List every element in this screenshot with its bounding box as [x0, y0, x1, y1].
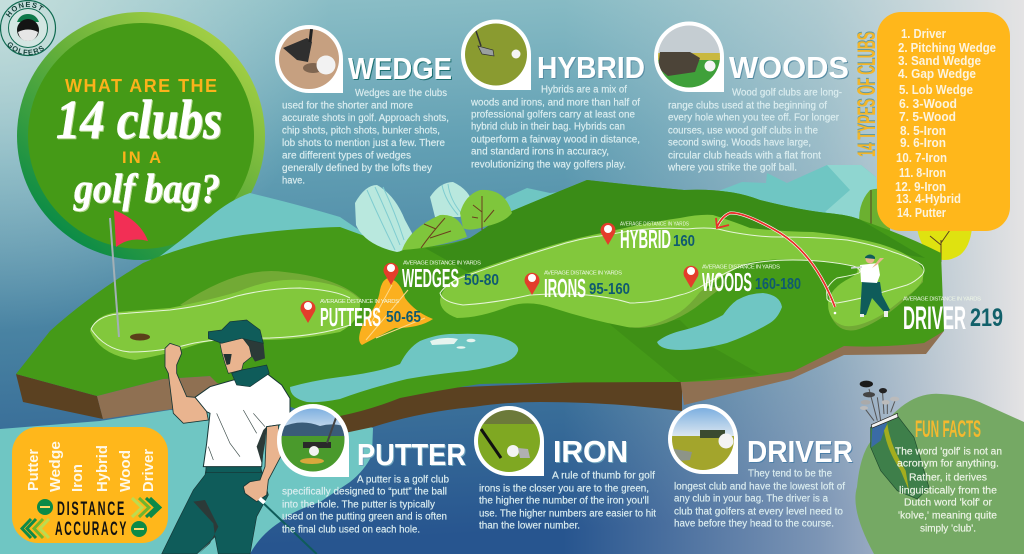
map label: irons: AVERAGE DISTANCE IN YARDS — [544, 270, 622, 276]
map label: wedges — [384, 260, 499, 293]
panel: distance and accuracy scale: DISTANCE — [57, 499, 126, 520]
logo: Honest Golfers — [0, 0, 56, 56]
body text: second swing. Woods have large, — [668, 138, 811, 148]
map label: woods: AVERAGE DISTANCE IN YARDS — [702, 264, 780, 270]
body text: are different types of wedges — [282, 150, 411, 162]
body text: used on the putting green and is often — [282, 512, 447, 522]
body text: Hybrids are a mix of — [541, 84, 627, 96]
bushes — [402, 190, 512, 250]
body text: the final club used on each hole. — [282, 524, 420, 536]
body text: irons is the closer you are to the green, — [479, 484, 649, 494]
map label: wedges: 50-80 — [464, 272, 499, 289]
photo: iron and ball — [474, 406, 544, 476]
map label: putters: PUTTERS — [320, 302, 381, 332]
body text: A rule of thumb for golf — [552, 470, 655, 482]
panel: distance and accuracy scale: Wedge — [47, 441, 64, 492]
body text: specifically designed to “putt” the ball — [282, 486, 447, 498]
pale leaves — [355, 182, 473, 252]
body text: have. — [282, 176, 305, 186]
heading: WOODS — [729, 50, 849, 85]
icon: accuracy minus — [131, 521, 147, 537]
body text: Dutch word 'kolf' or — [904, 498, 993, 508]
panel: list of 14 clubs: 3. Sand Wedge — [898, 53, 981, 68]
body text: every hole when you tee off. For longer — [668, 112, 840, 124]
body text: used for the shorter and more — [282, 100, 414, 112]
body text: the higher the number of the iron you'll — [479, 496, 649, 506]
heading: DRIVER — [747, 434, 853, 469]
body text: woods and irons, and more than half of — [470, 98, 640, 108]
body text: hybrid club in their bag. Hybrids can — [471, 122, 625, 132]
body text: simply 'club'. — [920, 524, 976, 534]
photo: hybrid club on grass — [461, 19, 531, 90]
fairway contour lines — [440, 228, 924, 305]
heading: IRON — [553, 434, 628, 469]
golf course land — [0, 180, 944, 554]
icon: distance minus — [37, 499, 53, 515]
panel: list of 14 clubs: 6. 3-Wood — [899, 96, 957, 111]
panel: distance and accuracy scale: Iron — [69, 464, 86, 492]
logo: Honest Golfers: HONEST — [6, 2, 44, 18]
body text — [470, 84, 640, 170]
body text: longest club and have the lowest loft of — [674, 482, 845, 492]
dark hill — [425, 180, 925, 275]
red shot arrow — [716, 213, 836, 314]
panel: distance and accuracy scale — [12, 427, 168, 543]
map label: hybrid: HYBRID — [620, 224, 671, 254]
photo: wedge in sand — [275, 25, 345, 95]
panel: distance and accuracy scale: Hybrid — [94, 445, 111, 492]
body text: linguistically from the — [899, 486, 997, 496]
body text: professional golfers carry at least one — [471, 110, 636, 120]
body text: and standard irons in accuracy, — [471, 146, 609, 158]
panel: list of 14 clubs: 12. 9-Iron — [895, 179, 946, 194]
icon: accuracy chevrons — [22, 519, 49, 538]
teal lake — [0, 410, 373, 554]
panel: list of 14 clubs: 13. 4-Hybrid — [896, 191, 961, 206]
title text: WHAT ARE THE — [65, 76, 217, 96]
body text: club that golfers at every level need to — [674, 506, 844, 518]
map label: hybrid — [601, 222, 695, 254]
panel: list of 14 clubs: 5. Lob Wedge — [899, 82, 973, 97]
body text: generally defined by the lofts they — [282, 163, 432, 174]
photo: wood club head — [654, 21, 724, 94]
body text: have before they head to the course. — [674, 518, 834, 530]
pin — [524, 273, 539, 295]
pond highlights — [430, 338, 476, 349]
sand trap — [359, 278, 433, 345]
grass — [16, 180, 944, 416]
body text: courses, use wood golf clubs in the — [668, 126, 819, 136]
map label: irons: IRONS — [544, 273, 586, 303]
right pond — [657, 293, 782, 350]
panel: fun facts — [855, 381, 1024, 554]
panel: list of 14 clubs: 1. Driver — [901, 26, 946, 41]
river pond — [290, 334, 518, 402]
body text: Wood golf clubs are long- — [732, 88, 842, 98]
map label: driver: AVERAGE DISTANCE IN YARDS — [903, 296, 981, 302]
body text: where you strike the golf ball. — [667, 162, 797, 174]
hole — [130, 334, 150, 340]
body text: into the hole. The putter is typically — [282, 500, 435, 510]
green blob — [855, 394, 1024, 554]
heading: WEDGE — [348, 51, 452, 86]
pin — [384, 263, 398, 285]
panel: list of 14 clubs: 14. Putter — [897, 205, 946, 220]
body text — [667, 88, 842, 174]
panel: distance and accuracy scale: Putter — [25, 449, 42, 491]
panel: list of 14 clubs: 2. Pitching Wedge — [898, 40, 996, 55]
pin — [684, 266, 698, 288]
heading: HYBRID — [537, 50, 645, 85]
body text — [479, 470, 656, 532]
title circle — [17, 12, 265, 260]
map label: wedges: WEDGES — [402, 263, 459, 293]
title text — [56, 76, 222, 211]
panel: distance and accuracy scale: Driver — [140, 449, 157, 492]
map label: irons: 95-160 — [589, 281, 630, 298]
map label: driver: DRIVER — [903, 300, 966, 336]
map label: woods: WOODS — [702, 267, 752, 297]
body text: than the lower number. — [479, 520, 580, 532]
body text — [895, 446, 1002, 534]
panel: iron — [474, 406, 656, 532]
body text: They tend to be the — [748, 468, 833, 480]
panel: hybrid — [461, 19, 645, 170]
panel: list of 14 clubs: 11. 8-Iron — [899, 165, 946, 180]
panel: wedge — [275, 25, 452, 186]
body text: accurate shots in golf. Approach shots, — [282, 113, 449, 124]
body text: circular club heads with a flat front — [668, 150, 821, 162]
soil edge — [340, 378, 682, 434]
map label: putters — [300, 299, 421, 332]
map label: driver: 219 — [970, 304, 1003, 332]
body text: acronym for anything. — [897, 458, 999, 470]
body text: The word 'golf' is not an — [895, 446, 1002, 458]
body text: any club in your bag. The driver is a — [674, 494, 829, 504]
map label: wedges: AVERAGE DISTANCE IN YARDS — [403, 260, 481, 266]
body text: lob shots to mention just a few. There — [282, 138, 446, 149]
body text: A putter is a golf club — [357, 474, 450, 486]
title text: IN A — [122, 149, 161, 167]
icon: golf bag — [860, 381, 929, 499]
panel: list of 14 clubs: 9. 6-Iron — [900, 135, 946, 150]
photo: putter and hole — [277, 404, 349, 477]
logo: Honest Golfers: GOLFERS — [8, 42, 44, 55]
back trees — [859, 189, 972, 262]
flag pole and flag — [110, 210, 148, 337]
body text: use. The higher numbers are easier to hit — [479, 508, 656, 520]
back hills and mountains — [127, 165, 972, 290]
logo face — [17, 14, 39, 41]
panel: putter — [277, 404, 466, 536]
panel: woods — [654, 21, 849, 174]
body text: Rather, it derives — [909, 472, 987, 484]
photo: driver and teed ball — [668, 404, 738, 476]
body text: 'kolve,' meaning quite — [898, 510, 997, 522]
body text — [282, 474, 450, 536]
panel: list of 14 clubs: 10. 7-Iron — [896, 150, 947, 165]
golfer swinging — [851, 254, 890, 317]
panel: distance and accuracy scale: ACCURACY — [55, 519, 128, 540]
panel: list of 14 clubs: 7. 5-Wood — [899, 109, 956, 124]
map label: hybrid: 160 — [673, 233, 695, 250]
panel: driver — [668, 404, 853, 530]
body text — [674, 468, 845, 530]
map label: woods: 160-180 — [755, 276, 801, 293]
map label: putters: 50-65 — [386, 309, 421, 326]
body text: outperform a fairway wood in distance, — [471, 134, 640, 146]
body text: Wedges are the clubs — [355, 88, 447, 99]
body text — [282, 88, 449, 186]
panel: list of 14 clubs — [877, 12, 1010, 231]
celebrating man illustration — [162, 320, 317, 554]
map label: putters: AVERAGE DISTANCE IN YARDS — [320, 299, 399, 305]
map label: hybrid: AVERAGE DISTANCE IN YARDS — [620, 222, 689, 228]
body text: revolutionizing the way golfers play. — [471, 160, 626, 170]
body text: range clubs used at the beginning of — [668, 100, 827, 112]
putting green — [90, 271, 362, 360]
panel: list of 14 clubs: 8. 5-Iron — [900, 123, 946, 138]
panel: list of 14 clubs: 4. Gap Wedge — [898, 66, 976, 81]
pin — [300, 301, 316, 323]
title text: golf bag? — [73, 165, 220, 211]
pin — [601, 223, 615, 245]
icon: distance chevrons — [132, 498, 160, 517]
body text: chip shots, pitch shots, bunker shots, — [282, 126, 440, 136]
title text: 14 clubs — [56, 89, 222, 150]
heading: PUTTER — [357, 437, 466, 472]
fairway — [440, 215, 924, 331]
panel: distance and accuracy scale: Wood — [117, 450, 134, 492]
